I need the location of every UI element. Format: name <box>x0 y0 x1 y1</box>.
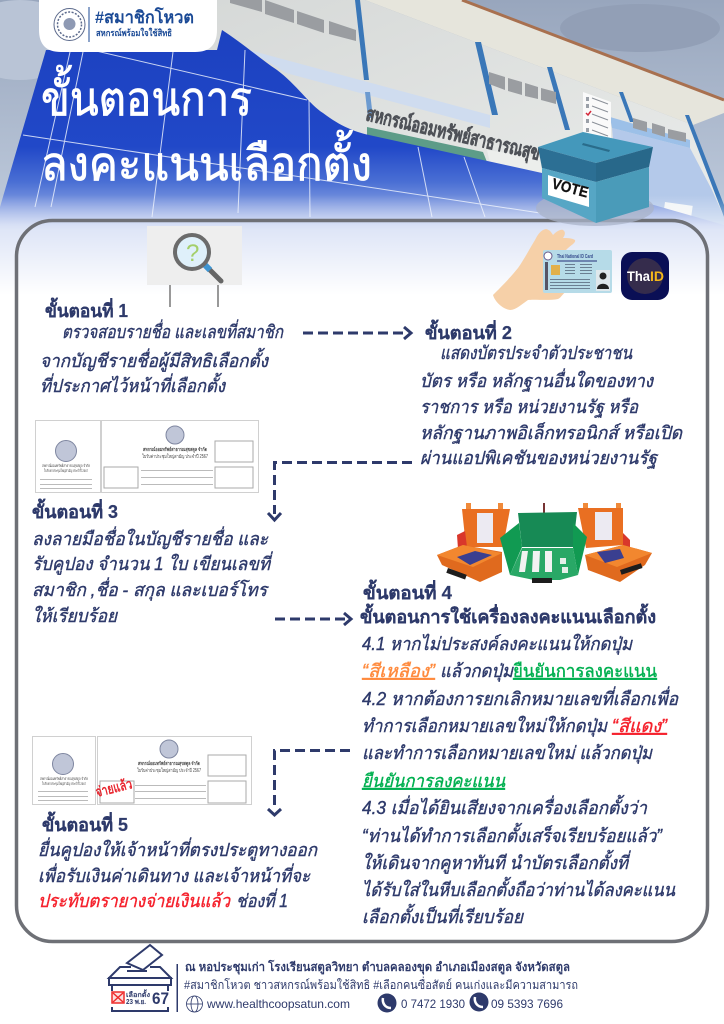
icon: ThaiD app: Tha <box>627 268 650 284</box>
step 4 body: “สีเหลือง” <box>362 661 436 681</box>
icon: ballot box <box>536 92 654 226</box>
coupon sample: step 5 stamped: ใบรับค่าประชุมใหญ่สามัญ ประจำปี 2567 <box>137 767 201 774</box>
coupon sample: step 3: ใบรับค่าประชุมใหญ่สามัญ ประจำปี 2567 <box>142 453 208 460</box>
step 4 body: “ท่านได้ทำการเลือกตั้งเสร็จเรียบร้อยแล้ว” <box>362 822 663 846</box>
step 4 body: 4.2 หากต้องการยกเลิกหมายเลขที่เลือกเพื่อ <box>362 686 679 709</box>
step 4 body: และทำการเลือกหมายเลขใหม่ แล้วกดปุ่ม <box>362 742 653 764</box>
step 4 body: ให้เดินจากคูหาทันที นำบัตรเลือกตั้งที่ <box>362 849 631 874</box>
logo tab <box>39 0 217 52</box>
step 2 body: แสดงบัตรประจำตัวประชาชน <box>440 343 633 363</box>
step 4 body: แล้วกดปุ่ม <box>440 661 514 682</box>
coupon sample: step 5 stamped: สหกรณ์ออมทรัพย์สาธารณสุขสตูล จำกัด <box>40 776 88 782</box>
arrow: step 4 to 5 <box>268 750 350 815</box>
footer hashtags: #สมาชิกโหวต ชาวสหกรณ์พร้อมใช้สิทธิ #เลือกคนซื่อสัตย์ คนเก่งและมีความสามารถ <box>184 976 578 992</box>
coupon sample: step 3 <box>36 420 258 492</box>
hashtag title: #สมาชิกโหวต <box>95 7 194 27</box>
step 5 body: เพื่อรับเงินค่าเดินทาง และเจ้าหน้าที่จะ <box>38 863 311 886</box>
icon: footer ballot box with date <box>109 945 171 1011</box>
step 2 body: ผ่านแอปพิเคชันของหน่วยงานรัฐ <box>420 448 659 469</box>
step 4 body: ยืนยันการลงคะแนน <box>362 771 506 791</box>
step 1 body <box>40 319 284 396</box>
step 4 body: ยืนยันการลงคะแนน <box>513 661 657 681</box>
id card and hand: Thai National ID Card <box>557 254 593 260</box>
step 4 body: ทำการเลือกหมายเลขใหม่ให้กดปุ่ม <box>362 715 608 737</box>
icon: phone 2 <box>470 992 488 1012</box>
phone number 2: 09 5393 7696 <box>491 997 563 1011</box>
icon: cooperative seal <box>54 8 85 40</box>
step 1 body: ที่ประกาศไว้หน้าที่เลือกตั้ง <box>40 372 226 396</box>
title <box>41 65 372 190</box>
step 5 body: ยื่นคูปองให้เจ้าหน้าที่ตรงประตูทางออก <box>38 837 318 861</box>
tagline: สหกรณ์พร้อมใจใช้สิทธิ <box>96 27 172 38</box>
coupon sample: step 5 stamped: สหกรณ์ออมทรัพย์สาธารณสุขสตูล จำกัด <box>138 760 200 768</box>
background: building photo <box>0 0 724 340</box>
coupon sample: step 5 stamped: ใบรับค่าประชุมใหญ่สามัญ ประจำปี 2567 <box>42 781 86 787</box>
arrow: step 3 to 4 <box>275 613 351 625</box>
coupon sample: step 3: สหกรณ์ออมทรัพย์สาธารณสุขสตูล จำกัด <box>143 446 207 454</box>
icon: phone 1 <box>378 994 396 1012</box>
main panel outline <box>16 220 708 942</box>
icon: globe <box>186 996 202 1012</box>
title: ขั้นตอนการ <box>41 65 252 125</box>
icon: footer ballot box with date: 67 <box>152 989 169 1008</box>
machine: right orange <box>578 503 652 582</box>
step 4 body <box>362 633 679 927</box>
step 1 heading: ขั้นตอนที่ 1 <box>45 297 128 321</box>
step 4 body: เลือกตั้งเป็นที่เรียบร้อย <box>362 903 524 927</box>
arrow: step 1 to 2 <box>303 327 411 339</box>
machine: left orange <box>437 503 510 582</box>
step 5 body: ช่องที่ 1 <box>236 888 288 911</box>
step 4 body: 4.1 หากไม่ประสงค์ลงคะแนนให้กดปุ่ม <box>362 633 633 655</box>
coupon sample: step 3: สหกรณ์ออมทรัพย์สาธารณสุขสตูล จำกัด <box>42 463 90 469</box>
icon: ThaiD app: ID <box>650 268 664 284</box>
icon: footer ballot box with date: 23 พ.ย. <box>126 999 146 1006</box>
coupon sample: step 3: ใบรับค่าประชุมใหญ่สามัญ ประจำปี 2567 <box>44 468 88 474</box>
step 3 body: ลงลายมือชื่อในบัญชีรายชื่อ และ <box>32 526 269 550</box>
icon: footer ballot box with date: เลือกตั้ง <box>126 988 151 999</box>
step 3 body: รับคูปอง จำนวน 1 ใบ เขียนเลขที่ <box>32 551 273 575</box>
step 3 body <box>32 526 273 626</box>
step 5 heading: ขั้นตอนที่ 5 <box>42 811 128 835</box>
step 1 body: ตรวจสอบรายชื่อ และเลขที่สมาชิก <box>62 319 284 342</box>
id card and hand <box>493 229 612 310</box>
icon: ballot box: VOTE <box>550 175 590 201</box>
step 1 body: จากบัญชีรายชื่อผู้มีสิทธิเลือกตั้ง <box>40 347 269 372</box>
step 4 subtitle: ขั้นตอนการใช้เครื่องลงคะแนนเลือกตั้ง <box>360 603 656 627</box>
step 2 body: หลักฐานภาพอิเล็กทรอนิกส์ หรือเปิด <box>420 422 683 444</box>
step 2 body: ราชการ หรือ หน่วยงานรัฐ หรือ <box>420 397 639 418</box>
step 4 body: 4.3 เมื่อได้ยินเสียงจากเครื่องเลือกตั้งว่า <box>362 794 648 818</box>
step 5 body <box>38 837 318 911</box>
step 2 body: บัตร หรือ หลักฐานอื่นใดของทาง <box>420 368 654 392</box>
phone number 1: 0 7472 1930 <box>401 997 465 1011</box>
step 4 body: ได้รับใส่ในหีบเลือกตั้งถือว่าท่านได้ลงคะแนน <box>362 876 676 900</box>
step 4 heading: ขั้นตอนที่ 4 <box>363 579 452 603</box>
step 5 body: ประทับตรายางจ่ายเงินแล้ว <box>38 891 231 911</box>
arrow: step 2 to 3 <box>268 462 412 520</box>
step 4 body: “สีแดง” <box>612 716 668 736</box>
coupon sample: step 5 stamped <box>32 736 252 804</box>
title: ลงคะแนนเลือกตั้ง <box>41 130 372 190</box>
step 3 heading: ขั้นตอนที่ 3 <box>32 498 118 522</box>
step 3 body: สมาชิก ,ชื่อ - สกุล และเบอร์โทร <box>32 577 269 601</box>
stamp: paid: จ่ายแล้ว <box>94 775 134 800</box>
step 2 body <box>420 343 683 469</box>
step 3 body: ให้เรียบร้อย <box>32 605 118 626</box>
building sign text: สหกรณ์ออมทรัพย์สาธารณสุข <box>364 102 542 166</box>
footer location: ณ หอประชุมเก่า โรงเรียนสตูลวิทยา ตำบลคลองขุด อำเภอเมืองสตูล จังหวัดสตูล <box>185 959 570 975</box>
step 1 icon: magnifier on sign <box>147 226 242 307</box>
voting machines <box>437 503 652 583</box>
footer website: www.healthcoopsatun.com <box>206 997 350 1011</box>
machine: green <box>500 503 587 583</box>
icon: ThaiD app <box>621 252 669 300</box>
step 1 icon: magnifier on sign: ? <box>186 240 199 267</box>
step 2 heading: ขั้นตอนที่ 2 <box>425 319 512 343</box>
